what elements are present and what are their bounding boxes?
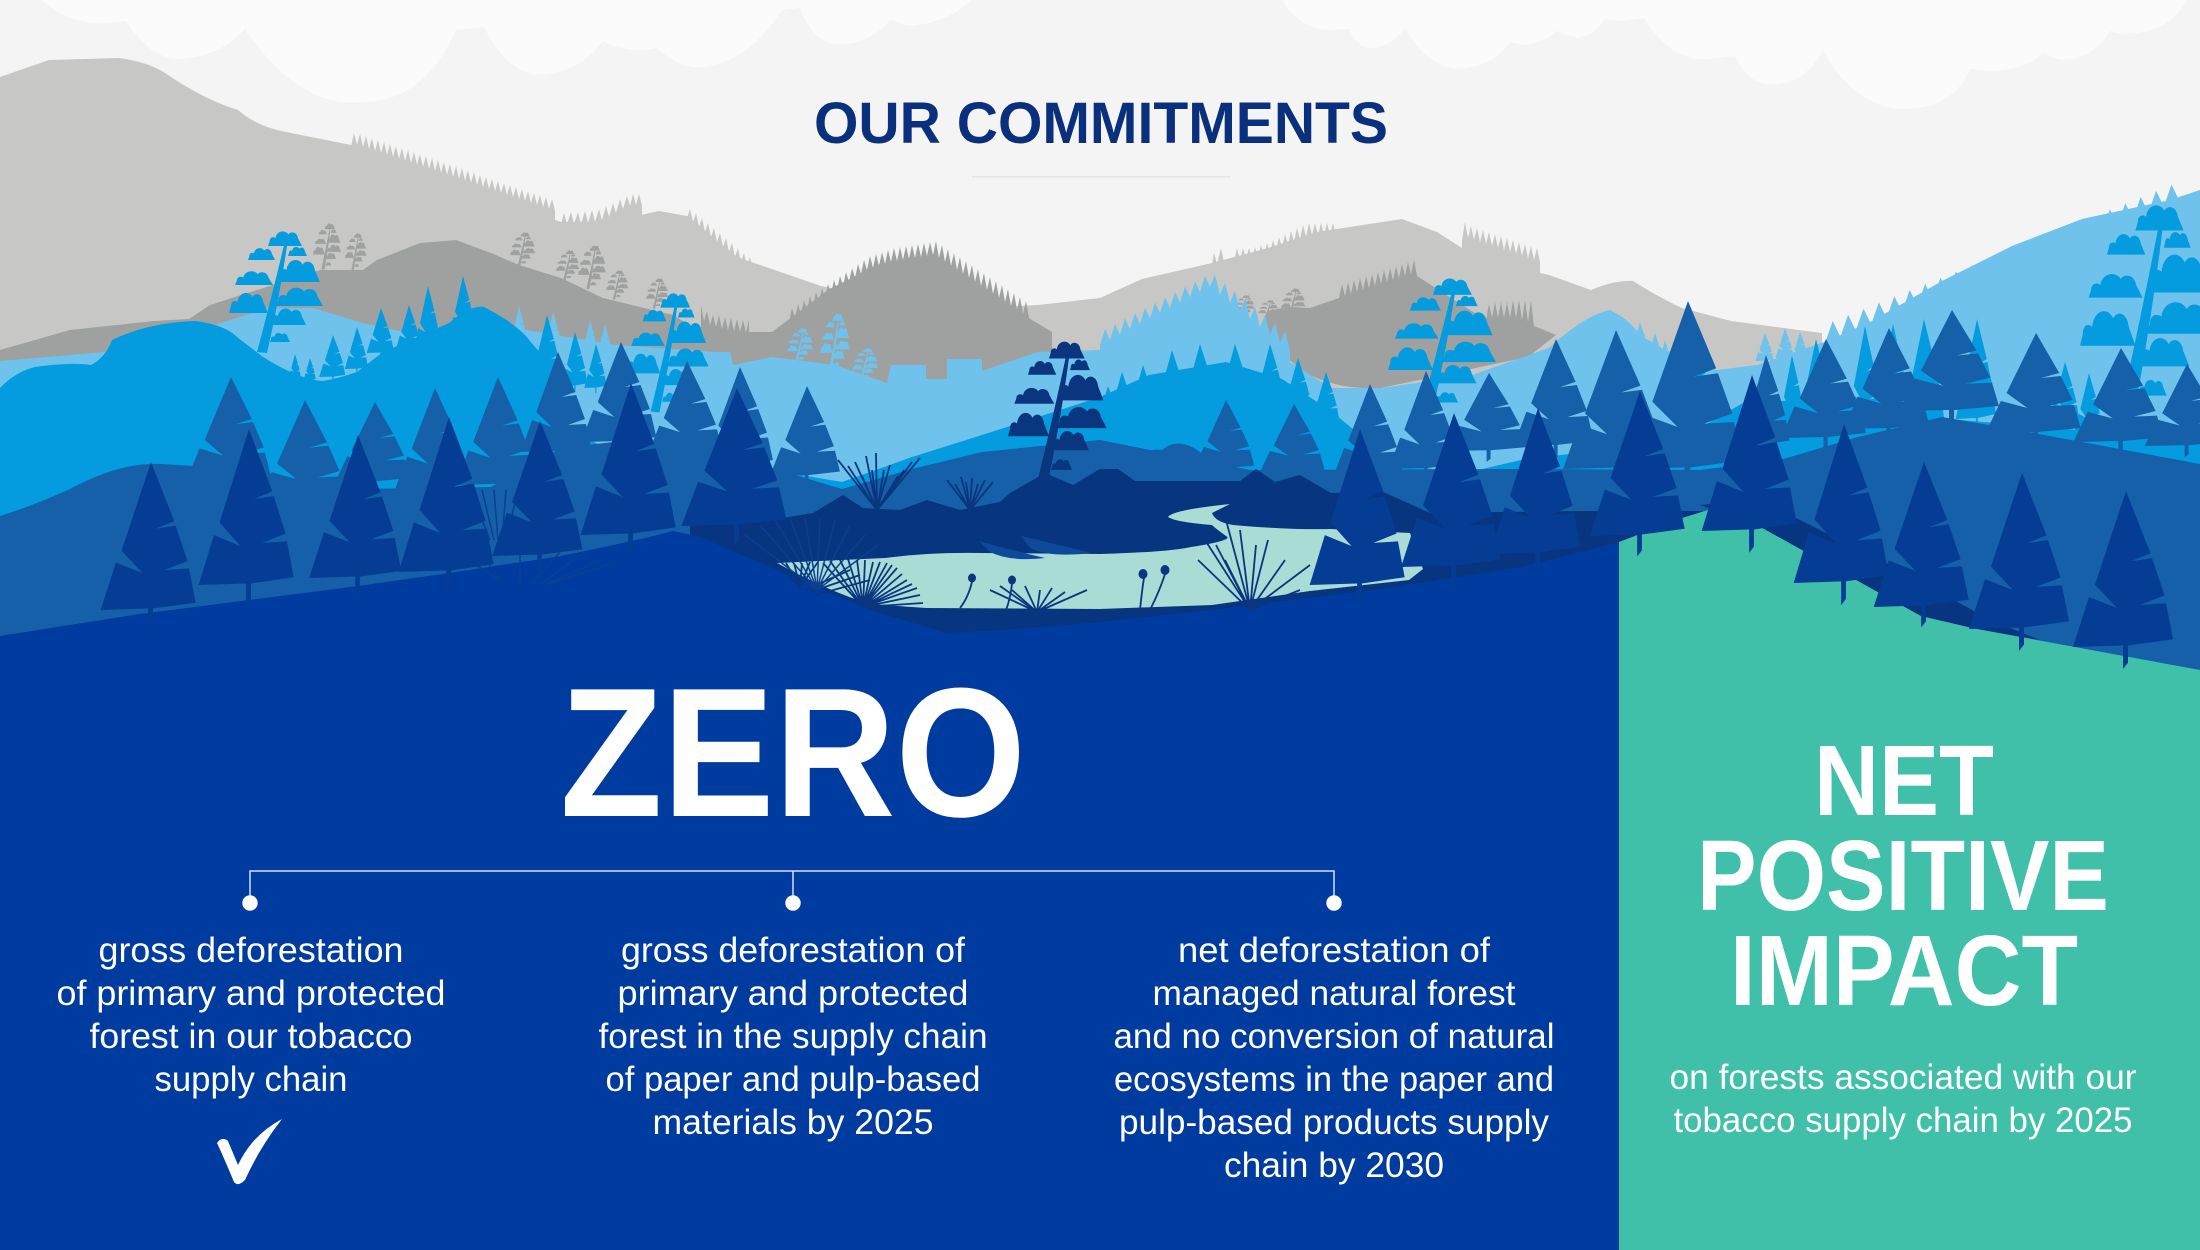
zero panel background [0, 531, 1619, 1250]
commitment 1 text: of primary and protected [56, 974, 446, 1013]
connector lines with dots [242, 871, 1342, 911]
light blue hills and ridge [0, 185, 2200, 650]
lake and river [777, 504, 1423, 609]
teal ridge shadow [1700, 500, 2040, 640]
commitment 2 text: materials by 2025 [652, 1103, 934, 1142]
net positive description: tobacco supply chain by 2025 [1674, 1101, 2132, 1140]
heading: net positive impact: IMPACT [1730, 915, 2078, 1027]
navy shoreline [690, 469, 1703, 640]
mid blue hills [0, 307, 2200, 650]
far grey mountains [0, 58, 1822, 500]
commitment 2 text: of paper and pulp-based [606, 1060, 980, 1099]
kayaks [979, 536, 1091, 559]
heading: net positive impact: NET [1814, 725, 1994, 837]
commitment 2 text: gross deforestation of [621, 931, 965, 970]
heading: net positive impact [1697, 725, 2109, 1027]
dark blue bush [1125, 443, 1225, 482]
commitment 1 text: gross deforestation [98, 931, 404, 970]
net positive description: on forests associated with our [1670, 1058, 2137, 1097]
commitment 2 text: primary and protected [618, 974, 968, 1013]
title underline [972, 176, 1231, 178]
foreground fir trees [101, 375, 2173, 669]
mid dark fir trees [186, 301, 2200, 521]
commitment 3 text: net deforestation of [1178, 931, 1490, 970]
blue pine trees [229, 205, 2200, 415]
commitment 3 text: pulp-based products supply [1119, 1103, 1549, 1142]
mid blue trees on light hills [289, 276, 2102, 464]
heading: net positive impact: POSITIVE [1697, 820, 2109, 932]
dark grey hills [0, 240, 1556, 420]
navy pine tree [1008, 342, 1107, 483]
commitment 3 text: ecosystems in the paper and [1114, 1060, 1554, 1099]
commitment 3 text [1114, 931, 1554, 1185]
commitment 3 text: managed natural forest [1152, 974, 1516, 1013]
commitment 1 text: supply chain [154, 1060, 348, 1099]
faint fan reeds over the shore [460, 490, 878, 590]
commitment 2 text: forest in the supply chain [598, 1017, 988, 1056]
dark blue hill [0, 417, 2200, 700]
title: OUR COMMITMENTS [814, 91, 1388, 156]
commitment 3 text: chain by 2030 [1224, 1146, 1444, 1185]
commitment 3 text: and no conversion of natural [1114, 1017, 1554, 1056]
commitment 1 text: forest in our tobacco [90, 1017, 412, 1056]
grey distant pines [313, 224, 1305, 320]
icon: check mark [217, 1119, 282, 1184]
clouds [42, 0, 2187, 109]
grasses and reeds [778, 453, 1310, 612]
heading: zero: ZERO [560, 649, 1026, 855]
net positive description [1670, 1058, 2137, 1140]
lake flower heads [968, 565, 1170, 584]
commitment 2 text [598, 931, 988, 1142]
net positive panel background [1619, 510, 2200, 1250]
commitment 1 text [56, 931, 446, 1099]
light blue distant pines [787, 314, 878, 380]
